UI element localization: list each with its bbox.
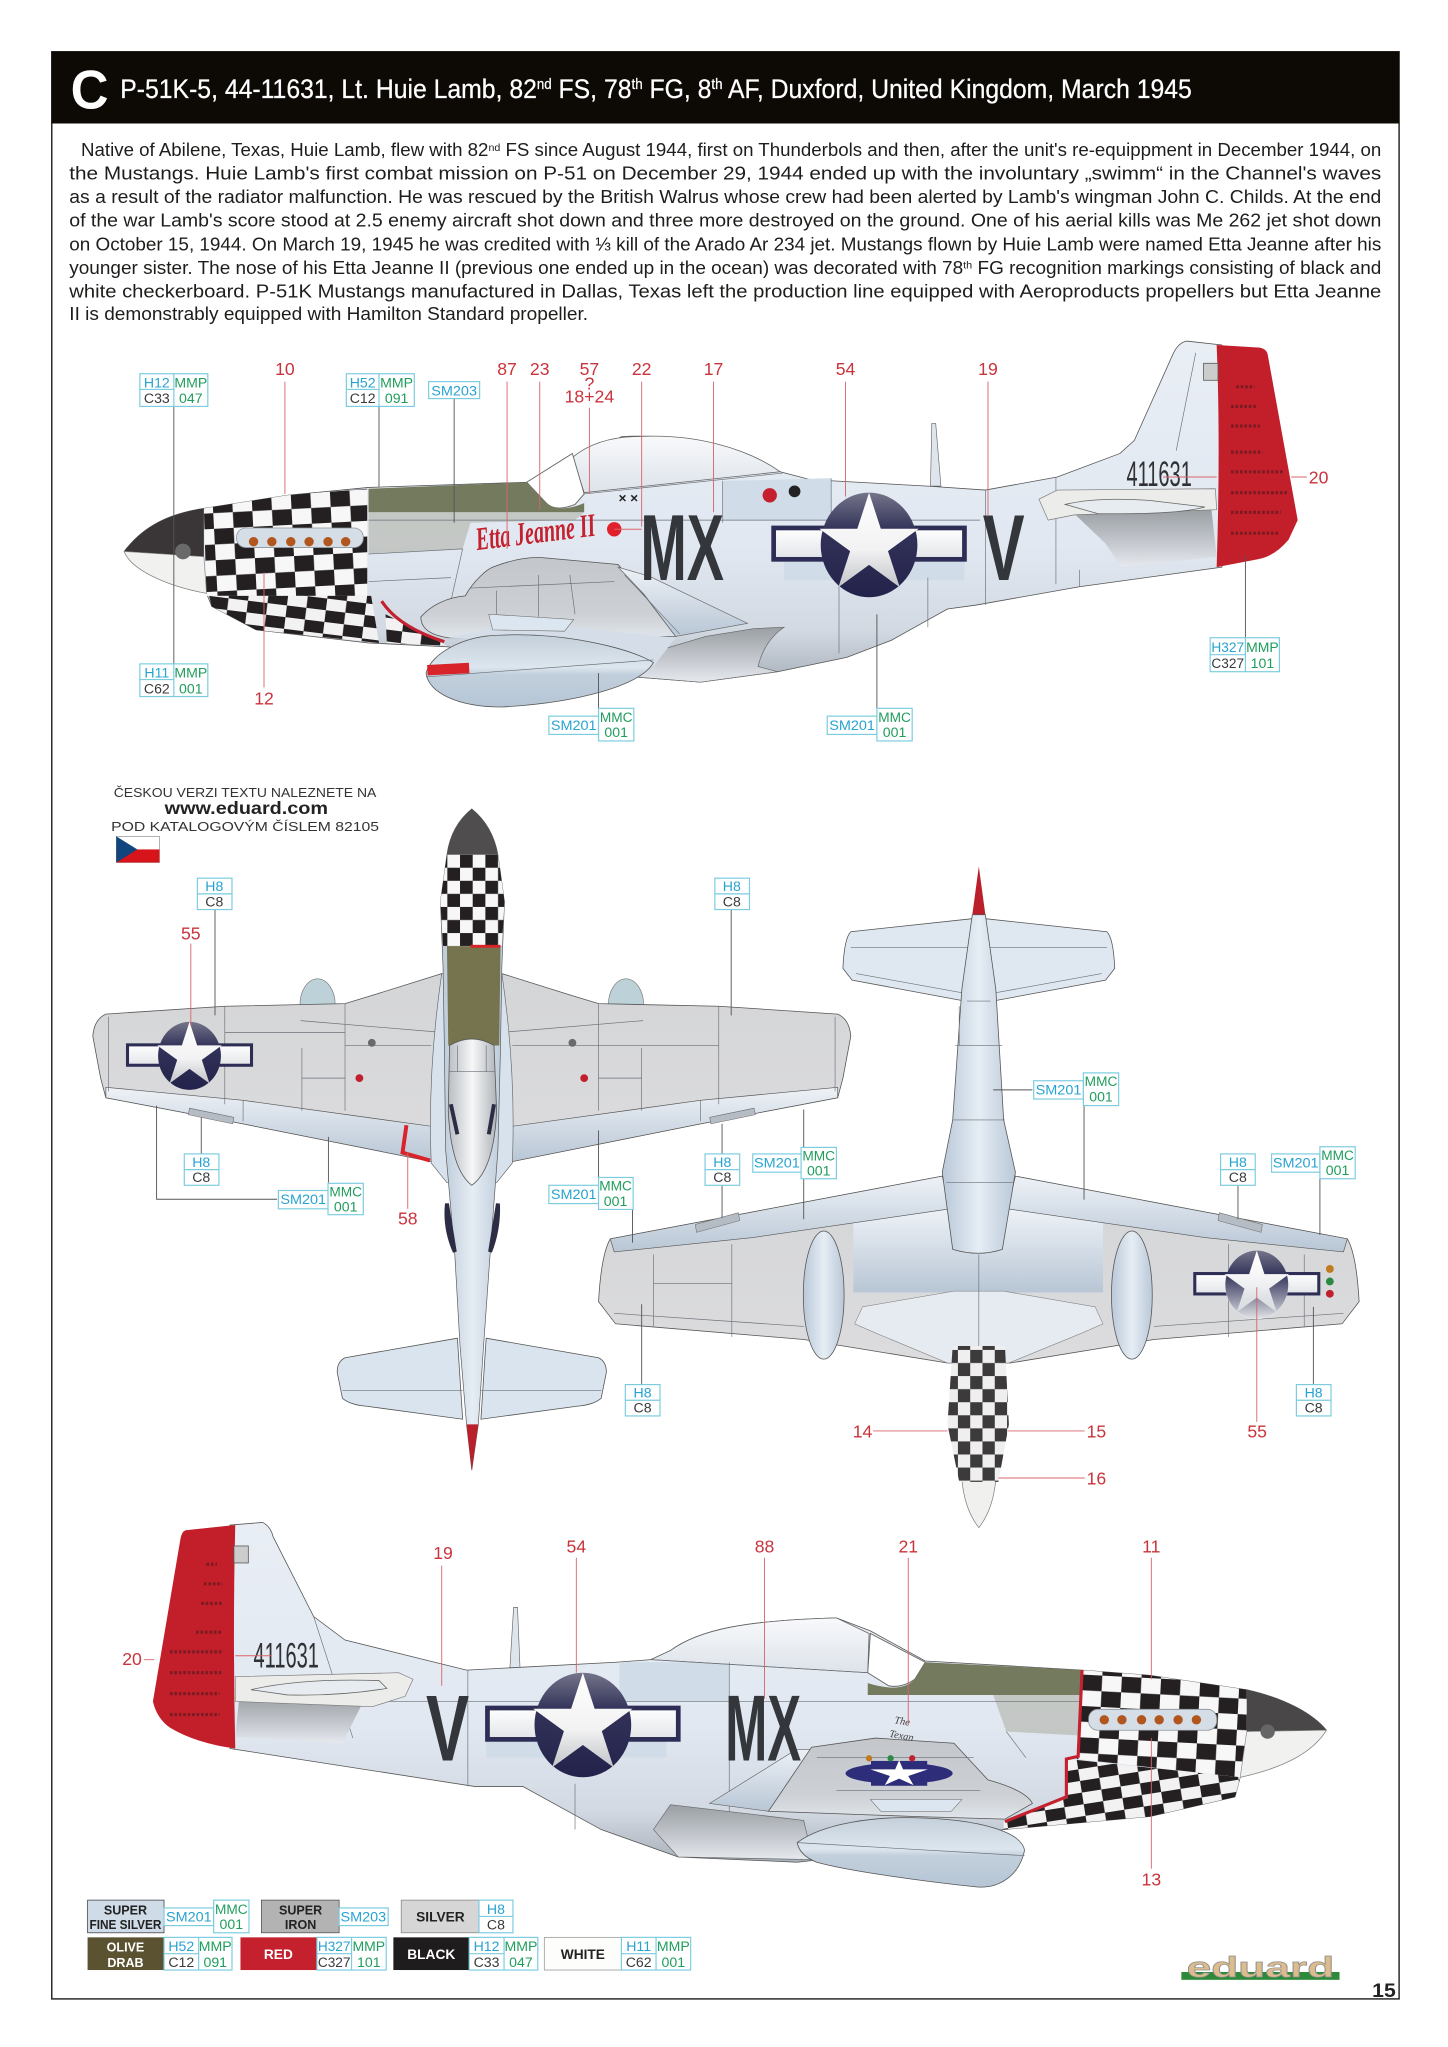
antenna mast	[510, 1607, 520, 1671]
colour callout SM201 centre	[753, 1147, 836, 1179]
colour callout H52 C12	[346, 374, 414, 406]
squadron emblem	[763, 488, 777, 502]
eduard logo	[1181, 1952, 1340, 1984]
colour callout H12 C33	[140, 374, 208, 406]
colour callout H8 wing top right: C8	[723, 893, 741, 909]
nose checkerboard	[1077, 1670, 1247, 1777]
Czech text note: www.eduard.com	[164, 798, 328, 818]
numbered decal callouts: plan views: 58	[398, 1208, 418, 1228]
colour callout H327 C327: C327	[1211, 655, 1244, 671]
national insignia	[774, 493, 964, 597]
colour callout SM201 right tip: 001	[1326, 1162, 1349, 1178]
legend: super iron	[261, 1900, 388, 1933]
left leading strip	[610, 1176, 950, 1252]
wing blisters	[300, 979, 335, 1031]
colour callout SM201 lower tank: MMC	[600, 709, 633, 725]
numbered decal callouts: plan views: 55	[1247, 1422, 1267, 1442]
numbered decal callouts: left side: 87	[497, 359, 517, 379]
legend: red: C327	[318, 1954, 351, 1970]
legend: super fine silver: 001	[220, 1916, 243, 1932]
colour callout SM201 lower fuselage	[827, 708, 912, 741]
legend: black: 047	[509, 1954, 533, 1970]
numbered decal callouts: plan views	[181, 924, 1267, 1489]
legend: white	[544, 1937, 691, 1970]
legend: olive drab: C12	[168, 1954, 194, 1970]
right wing	[502, 974, 851, 1162]
colour callout SM201 right wing: 001	[604, 1193, 627, 1209]
colour callout H8 wing top left: C8	[205, 893, 224, 909]
legend: olive drab: DRAB	[107, 1956, 144, 1970]
colour callout SM201 lower tank: 001	[604, 724, 628, 740]
colour callout SM201 lower tank	[549, 708, 634, 741]
colour callout SM201 right tip	[1272, 1147, 1355, 1179]
history text block: of the war Lamb's score stood at 2.5 enemy aircraft shot down and three more destroyed on the ground. One of his aerial kills was Me 262 jet shot down	[69, 210, 1381, 231]
colour callout SM201 centre: 001	[807, 1162, 831, 1178]
colour callout H12 C33: C33	[144, 390, 170, 406]
numbered decal callouts: left side: 19	[978, 359, 998, 379]
legend: olive drab: MMP	[199, 1938, 232, 1954]
legend: super iron: SUPER	[279, 1903, 322, 1917]
page number: 15	[1372, 1980, 1396, 2002]
history text block: the Mustangs. Huie Lamb's first combat mission on P-51 on December 29, 1944 ended up with the involuntary „swimm“ in the Channel's waves	[69, 163, 1381, 184]
legend: black	[393, 1937, 538, 1970]
horizontal stabiliser	[1039, 489, 1217, 520]
lower cowl checkerboard	[209, 596, 447, 646]
colour callout H8 aileron left: H8	[192, 1154, 210, 1170]
tail trim tab square	[1204, 363, 1218, 380]
colour callout SM201 centre: MMC	[802, 1147, 835, 1163]
title: FS, 78	[552, 74, 632, 104]
red fin	[972, 866, 985, 915]
legend: super iron: IRON	[285, 1918, 316, 1932]
wing leading panel	[710, 1749, 829, 1811]
engine panels	[369, 512, 584, 554]
right wing leading strip	[511, 1087, 838, 1162]
colour callout H52 C12: 091	[385, 390, 409, 406]
drop tank	[426, 635, 653, 707]
title: th	[711, 77, 722, 93]
numbered decal callouts: left side: 10	[275, 359, 295, 379]
left wing	[599, 1176, 979, 1363]
rear fuselage	[942, 915, 1015, 1253]
numbered decal callouts: right side: 11	[1142, 1536, 1160, 1556]
title: nd	[537, 77, 552, 93]
colour callout H8 wing top left: H8	[205, 878, 224, 894]
colour callout H327 C327	[1210, 638, 1279, 672]
nose checkerboard	[440, 855, 504, 946]
red cowl line	[1005, 1670, 1082, 1822]
colour callout H8 right tip: C8	[1305, 1400, 1323, 1416]
numbered decal callouts: left side: 54	[836, 359, 856, 379]
fuselage code MX: MX	[725, 1675, 801, 1780]
wing root dome	[768, 1738, 1032, 1819]
numbered decal callouts: right side: 13	[1142, 1870, 1161, 1890]
colour callout SM201 right tip: MMC	[1321, 1147, 1354, 1163]
rudder	[153, 1525, 235, 1749]
olive anti-glare panel	[369, 482, 584, 512]
aircraft: left side profile	[124, 341, 1298, 707]
colour callout H52 C12: H52	[350, 374, 376, 390]
colour callout H8 wing top left	[197, 878, 232, 910]
colour legend	[88, 1900, 691, 1970]
tail shading	[235, 1696, 366, 1743]
red cowl line	[382, 601, 444, 642]
fuselage	[440, 809, 504, 1470]
colour callout H8 wing top right: H8	[723, 878, 741, 894]
red walkway L marking	[403, 1125, 430, 1160]
legend: red: MMP	[352, 1938, 385, 1954]
right wing	[979, 1176, 1359, 1363]
legend: olive drab: OLIVE	[107, 1941, 144, 1955]
colour callout H11 C62: 001	[179, 680, 203, 696]
colour callout SM203: SM203	[431, 382, 477, 398]
numbered decal callouts: right side: 19	[433, 1543, 453, 1563]
colour callout H8 right tip: H8	[1305, 1385, 1323, 1401]
legend: silver: C8	[487, 1917, 505, 1933]
legend: super fine silver: MMC	[215, 1901, 248, 1917]
red wing dots	[355, 1074, 588, 1082]
legend: black: H12	[474, 1938, 500, 1954]
icon: Czech flag	[116, 836, 159, 862]
colour callout SM201 left wing	[278, 1183, 363, 1215]
nose checkerboard	[947, 1346, 1009, 1482]
exhaust stack	[237, 528, 363, 548]
spinner	[962, 1479, 996, 1528]
numbered decal callouts: plan views: 55	[181, 924, 201, 944]
legend: red: 101	[357, 1954, 381, 1970]
colour callout SM201 lower fuselage: 001	[883, 724, 906, 740]
nose art The Texan: The	[893, 1715, 911, 1729]
numbered decal callouts: left side: 18+24	[565, 386, 614, 406]
windscreen	[527, 453, 584, 508]
colour callout H8 aileron left	[184, 1154, 219, 1185]
left wing	[93, 974, 442, 1162]
header bar	[52, 52, 1399, 123]
tail shading	[1074, 510, 1217, 567]
colour callout H327 C327: MMP	[1246, 639, 1279, 655]
colour callout H12 C33: MMP	[174, 374, 207, 390]
red cowl line	[470, 945, 501, 948]
legend: red	[240, 1937, 386, 1970]
legend: red: RED	[264, 1947, 293, 1962]
colour callout H327 C327: 101	[1251, 655, 1274, 671]
legend: super fine silver: FINE SILVER	[90, 1918, 161, 1932]
colour callout SM201 fuselage: MMC	[1085, 1073, 1117, 1089]
gear door	[870, 1799, 962, 1811]
title: th	[632, 77, 643, 93]
engine panels	[993, 1695, 1079, 1735]
fuselage	[124, 341, 1222, 682]
wing lights	[1326, 1265, 1334, 1298]
legend: super fine silver: SM201	[166, 1909, 212, 1925]
antenna mast	[930, 423, 941, 486]
wing root dome	[421, 558, 676, 638]
drop tank	[797, 1818, 1025, 1887]
legend: white: 001	[662, 1954, 685, 1970]
centre wing section	[853, 1209, 1103, 1292]
history text block: white checkerboard. P-51K Mustangs manufactured in Dallas, Texas left the production line equipped with Aeroproducts propellers but Etta Jeanne	[68, 280, 1381, 301]
numbered decal callouts: left side: 20	[1309, 468, 1329, 488]
colour callout H8 right tip	[1296, 1385, 1331, 1416]
right leading strip	[1008, 1176, 1347, 1252]
numbered decal callouts: left side: 17	[704, 359, 723, 379]
colour callout SM201 fuselage: SM201	[1036, 1081, 1082, 1097]
fuselage code V: V	[983, 495, 1025, 600]
legend: olive drab: 091	[203, 1954, 227, 1970]
colour callout H12 C33: 047	[179, 390, 203, 406]
colour callout SM201 right wing	[549, 1177, 633, 1209]
history text block	[68, 139, 1381, 324]
history text block: on October 15, 1944. On March 19, 1945 he was credited with ⅓ kill of the Arado Ar 234 jet. Mustangs flown by Huie Lamb were named Etta Jeanne after his	[69, 233, 1381, 254]
history text block: nd	[488, 143, 501, 154]
aircraft: right side profile	[153, 1522, 1326, 1887]
fuselage code V: V	[426, 1675, 469, 1780]
colour callout H8 right aileron	[1221, 1154, 1255, 1185]
Czech text note: ČESKOU VERZI TEXTU NALEZNETE NA	[114, 785, 377, 800]
title: AF, Duxford, United Kingdom, March 1945	[722, 74, 1192, 104]
colour callout SM201 left wing: MMC	[329, 1183, 362, 1199]
legend: olive drab: H52	[168, 1938, 194, 1954]
legend: super fine silver: SUPER	[104, 1903, 147, 1917]
nose art The Texan: Texan	[888, 1729, 914, 1744]
legend: silver: SILVER	[416, 1910, 465, 1925]
legend: super iron: SM203	[340, 1909, 386, 1925]
fuselage	[230, 1522, 1326, 1862]
wing insignia on dome	[846, 1760, 953, 1785]
numbered decal callouts: right side: 54	[567, 1536, 586, 1556]
nose art Etta Jeanne II: Etta Jeanne II	[473, 508, 598, 558]
aircraft: top view	[93, 809, 851, 1470]
panel tint behind cockpit	[723, 478, 964, 580]
fuselage code MX: MX	[640, 495, 724, 600]
colour callout SM201 left wing: SM201	[280, 1191, 326, 1207]
spinner	[447, 809, 498, 855]
wing lights	[866, 1755, 915, 1761]
panel tint behind cockpit	[486, 1662, 729, 1758]
fuselage band marks	[446, 1104, 498, 1252]
history text block: FS since August 1944, first on Thunderbols and then, after the unit's re-equippment in December 1944, on	[500, 139, 1381, 160]
title: FG, 8	[643, 74, 711, 104]
legend: super fine silver	[88, 1900, 249, 1933]
national insignia	[487, 1673, 678, 1777]
colour callout SM201 fuselage: 001	[1089, 1089, 1113, 1105]
numbered decal callouts: plan views: 16	[1087, 1469, 1106, 1489]
colour callout H8 centre: H8	[713, 1154, 731, 1170]
drop tanks	[803, 1231, 844, 1359]
colour callout H11 C62: H11	[144, 665, 169, 681]
serial number: 411631	[254, 1636, 319, 1675]
colour callout H8 aileron left: C8	[192, 1169, 210, 1185]
red circle stencil	[607, 522, 621, 536]
windscreen	[868, 1634, 925, 1686]
numbered decal callouts: right side: 88	[755, 1536, 775, 1556]
wing root fairings	[430, 974, 513, 1183]
numbered decal callouts: left side: 22	[632, 359, 651, 379]
numbered decal callouts: right side: 20	[122, 1649, 142, 1669]
olive anti-glare panel	[447, 946, 501, 1045]
serial number: 411631	[1126, 455, 1192, 494]
grey wing dots	[368, 1039, 576, 1047]
olive anti-glare panel	[868, 1662, 1082, 1695]
radiator scoop	[653, 1805, 813, 1860]
rudder	[1217, 345, 1298, 567]
wing insignia	[1195, 1250, 1319, 1319]
canopy	[448, 1039, 497, 1185]
legend: white: WHITE	[561, 1947, 605, 1962]
Czech text note: POD KATALOGOVÝM ČÍSLEM 82105	[111, 819, 379, 834]
legend: black: C33	[474, 1954, 500, 1970]
numbered decal callouts: left side: 23	[530, 359, 550, 379]
legend: olive drab	[88, 1937, 232, 1970]
colour callout H8 centre	[705, 1154, 740, 1185]
legend: black: BLACK	[407, 1947, 455, 1962]
legend: white: MMP	[657, 1938, 690, 1954]
colour callout SM201 lower tank: SM201	[551, 717, 597, 733]
exhaust stack	[1089, 1709, 1217, 1730]
lower cowl checkerboard	[1004, 1759, 1240, 1830]
colour callout H12 C33: H12	[144, 374, 170, 390]
colour callout H327 C327: H327	[1211, 639, 1244, 655]
title: P-51K-5, 44-11631, Lt. Huie Lamb, 82	[120, 74, 571, 104]
numbered decal callouts: left side: 12	[254, 688, 274, 708]
tail trim tab square	[234, 1546, 248, 1563]
history text block: FG recognition markings consisting of black and	[972, 257, 1381, 278]
colour callout H8 tail side: C8	[634, 1400, 652, 1416]
eduard logo: eduard	[1187, 1952, 1334, 1984]
horizontal stabiliser	[235, 1673, 413, 1707]
aileron inserts	[188, 1108, 755, 1124]
numbered decal callouts: plan views: 15	[1087, 1422, 1106, 1442]
numbered decal callouts: plan views: 14	[853, 1422, 873, 1442]
colour callout H11 C62: C62	[144, 680, 170, 696]
colour callout H8 centre: C8	[713, 1169, 731, 1185]
numbered decal callouts: right side: 21	[898, 1536, 918, 1556]
colour callout SM201 lower fuselage: SM201	[829, 717, 875, 733]
colour leader lines: left side	[174, 399, 1245, 708]
legend: black: MMP	[504, 1938, 537, 1954]
history text block: th	[963, 261, 972, 272]
history text block: as a result of the radiator malfunction. He was rescued by the British Walrus whose crew had been alerted by Lamb's wingman John C. Childs. At the end	[69, 186, 1381, 207]
centre fairing	[855, 1291, 1103, 1363]
colour callout SM201 left wing: 001	[334, 1198, 358, 1214]
colour callout H11 C62	[140, 664, 208, 697]
colour callout H11 C62: MMP	[174, 665, 207, 681]
spinner	[124, 508, 204, 557]
red fin	[467, 1424, 478, 1470]
left tailplane	[337, 1338, 463, 1419]
nose checkerboard	[204, 489, 367, 596]
aircraft: bottom view	[599, 866, 1359, 1528]
colour callout SM201 right tip: SM201	[1273, 1155, 1319, 1171]
version letter: C	[71, 58, 108, 120]
spinner	[1247, 1690, 1326, 1732]
colour callout SM201 fuselage	[1034, 1073, 1119, 1106]
right tailplane	[481, 1338, 606, 1419]
gear door	[489, 614, 574, 631]
panel lines	[369, 353, 1196, 653]
numbered decal callouts: left side: ?	[584, 373, 594, 393]
legend: red: H327	[318, 1938, 351, 1954]
history text block: Native of Abilene, Texas, Huie Lamb, flew with 82	[81, 139, 480, 160]
canopy	[572, 436, 780, 493]
history text block: younger sister. The nose of his Etta Jeanne II (previous one ended up in the ocean) was decorated with 78	[69, 257, 931, 278]
colour leader lines: plan views	[157, 908, 1320, 1384]
tailplanes	[843, 919, 1115, 1001]
victory marks: ✕ ✕	[618, 494, 639, 505]
numbered decal callouts: right side	[122, 1536, 1161, 1890]
aileron inserts	[695, 1213, 1262, 1232]
numbered decal callouts: left side	[254, 359, 1329, 708]
canopy	[651, 1618, 869, 1673]
numbered decal callouts: left side: 57	[580, 359, 599, 379]
colour callout H8 tail side: H8	[634, 1385, 652, 1401]
colour callout H52 C12: C12	[350, 390, 376, 406]
legend: silver	[401, 1900, 513, 1933]
colour callout H8 right aileron: C8	[1229, 1169, 1247, 1185]
wing insignia	[128, 1022, 252, 1090]
colour callout H8 tail side	[625, 1385, 660, 1416]
colour callout SM201 right wing: SM201	[551, 1186, 597, 1202]
colour callout SM201 right wing: MMC	[599, 1178, 632, 1194]
colour callout H8 wing top right	[715, 878, 749, 910]
Czech text note	[111, 785, 379, 834]
legend: white: H11	[626, 1938, 651, 1954]
colour callout H52 C12: MMP	[380, 374, 413, 390]
history text block: II is demonstrably equipped with Hamilton Standard propeller.	[69, 303, 588, 324]
colour callout H8 right aileron: H8	[1229, 1154, 1247, 1170]
legend: white: C62	[626, 1954, 652, 1970]
colour callout SM201 lower fuselage: MMC	[878, 709, 911, 725]
wing leading panel	[618, 567, 748, 636]
radiator scoop	[635, 627, 784, 682]
colour callout SM201 centre: SM201	[754, 1155, 800, 1171]
left wing leading strip	[106, 1087, 433, 1162]
legend: silver: H8	[487, 1901, 505, 1917]
